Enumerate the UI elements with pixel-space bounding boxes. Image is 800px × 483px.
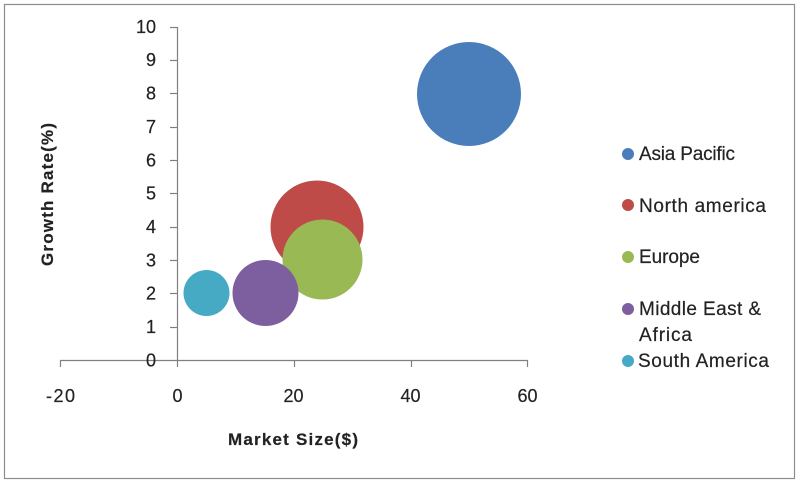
- x axis tick labels: [46, 386, 538, 406]
- y axis tick labels: 1: [146, 317, 156, 337]
- y axis tick labels: 10: [136, 17, 156, 37]
- legend: Middle East & Africa: Middle East &: [639, 299, 761, 320]
- legend: South America: South America: [638, 351, 769, 372]
- x axis tick labels: 40: [400, 386, 421, 406]
- bubble: North america: [270, 180, 364, 274]
- x axis tick labels: 60: [518, 386, 538, 406]
- bubble: Middle East & Africa: [232, 260, 298, 326]
- y axis title: Growth Rate(%): [38, 123, 57, 266]
- legend: Middle East & Africa: [622, 299, 761, 346]
- y axis tick labels: 4: [146, 217, 156, 237]
- bubble: Europe: [282, 220, 362, 300]
- y axis tick labels: 8: [146, 84, 156, 104]
- x axis tick labels: 0: [172, 386, 183, 406]
- y axis tick labels: 3: [146, 250, 156, 270]
- y axis tick labels: [136, 17, 156, 370]
- legend: [622, 144, 769, 372]
- x axis title: Market Size($): [228, 430, 358, 449]
- x axis tick labels: 20: [284, 386, 304, 406]
- y axis tick labels: 2: [146, 284, 156, 304]
- axes: [60, 27, 528, 367]
- bubble: South America: [184, 270, 230, 316]
- x axis tick labels: -20: [46, 386, 75, 406]
- y axis tick labels: 7: [146, 117, 156, 137]
- bubble: Asia Pacific: [417, 42, 521, 146]
- y axis tick labels: 5: [146, 184, 156, 204]
- y axis tick labels: 6: [146, 150, 156, 170]
- legend: Middle East & Africa: Africa: [639, 325, 692, 346]
- legend: North america: North america: [639, 196, 766, 217]
- y axis tick labels: 0: [146, 350, 156, 370]
- y axis tick labels: 9: [146, 50, 156, 70]
- legend: Europe: Europe: [639, 247, 700, 268]
- legend: Asia Pacific: Asia Pacific: [639, 144, 735, 165]
